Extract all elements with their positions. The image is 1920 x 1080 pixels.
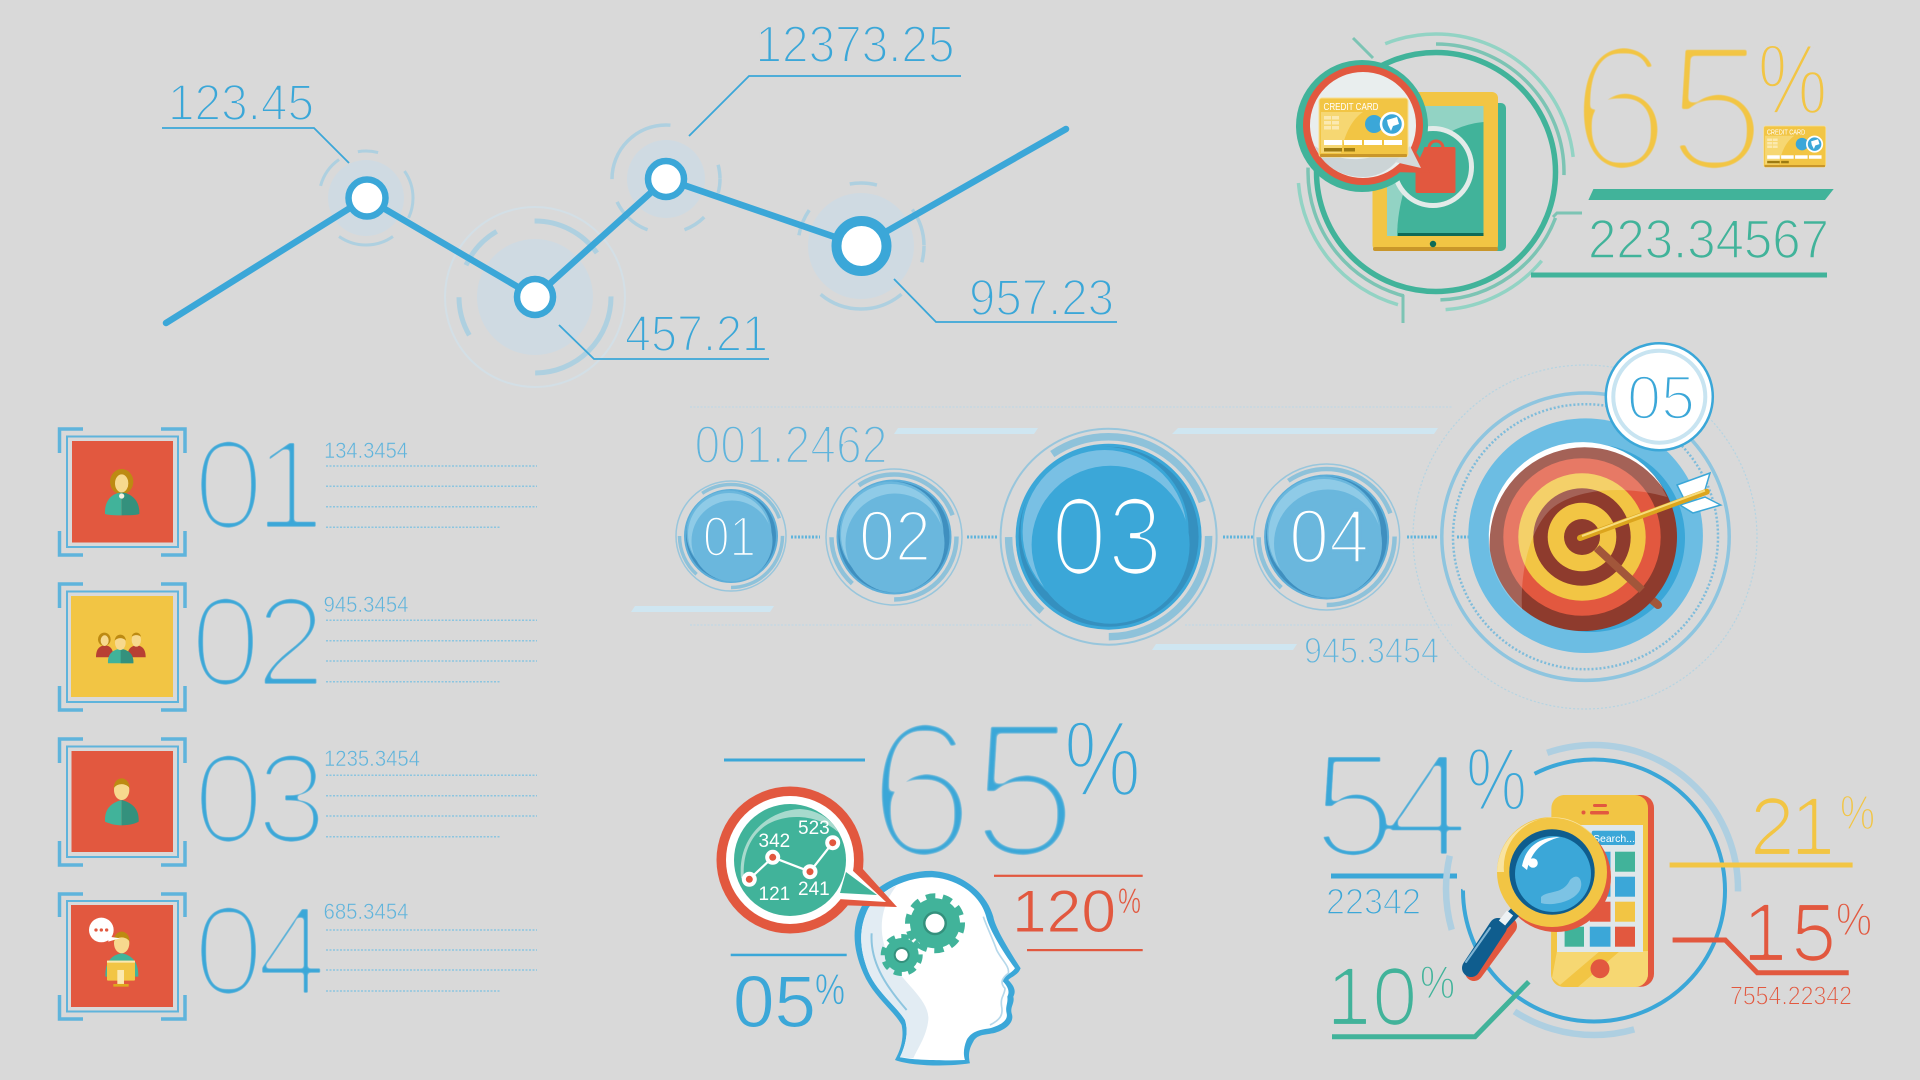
light rails [631,407,1452,650]
big blue 65 percent: 65 [867,681,1078,899]
value 02: 945.3454 [324,592,408,617]
frame 04 [60,894,185,1019]
shopping bag [1416,141,1456,193]
phone: Search... [1593,833,1635,845]
panel: step circles timeline [631,343,1757,709]
head silhouette [855,871,1021,1065]
list row 02 [60,571,537,714]
target disc [1468,418,1703,653]
speech bubble chart: 121 [758,884,790,905]
big blue 65 percent: % [1064,698,1141,819]
icon: woman [105,469,139,515]
credit card large: CREDIT CARD [1324,102,1378,113]
line chart panel [162,16,1117,387]
circle 03: 03 [1051,476,1163,598]
speech bubble chart: 523 [798,818,830,839]
phone rings [1446,741,1742,1037]
value 001.2462: 001.2462 [694,415,888,475]
value 945.3454: 945.3454 [1304,630,1439,671]
green 10 percent [1326,952,1529,1042]
green 10 percent: % [1420,956,1455,1008]
blue 05 percent: 05 [733,962,816,1043]
icon: man at computer [89,918,138,987]
speech bubble [1296,60,1430,192]
teal bar [1588,189,1834,200]
chart labels [168,16,1114,362]
chart labels: 457.21 [625,305,768,362]
magnifier [1466,817,1611,972]
dotted lines 01 [326,466,537,527]
value 03: 1235.3454 [324,746,420,771]
teal value: 223.34567 [1588,208,1829,270]
blue rule 54 [1331,874,1457,878]
red 120 percent: 120 [1012,878,1116,945]
dartboard [1488,442,1685,632]
list row 04 [60,880,537,1023]
target rings [1413,365,1757,709]
circle 04 [1254,464,1400,610]
value 01: 134.3454 [324,438,408,463]
panel: numbered list [60,414,537,1023]
number 03: 03 [193,728,327,871]
target 05 [1413,343,1757,709]
big yellow 65 percent: 65 [1570,8,1766,209]
list row 01 [60,414,537,557]
phone [1551,795,1654,987]
badge 05: 05 [1627,364,1695,433]
number 04: 04 [193,880,327,1023]
speech bubble chart [716,786,897,934]
dotted lines 03 [326,775,537,837]
dotted lines 02 [326,620,537,682]
blue 05 percent: % [815,965,845,1014]
red 15 percent [1673,888,1872,1010]
frame 02 [60,584,185,710]
credit card large [1319,98,1408,157]
blue 05 percent [731,954,847,1043]
chart halos [319,125,924,387]
badge 05 [1606,343,1713,450]
blue rule [724,758,865,762]
icon: man [105,778,139,825]
panel: head and gears [716,681,1143,1065]
circle 01: 01 [703,505,756,569]
panel: credit card tablet [1296,8,1834,323]
list row 03 [60,728,537,871]
number 01: 01 [193,414,325,557]
big blue 54 percent: 54 [1312,721,1469,889]
circle 04: 04 [1289,494,1369,580]
red 15 percent: 7554.22342 [1730,982,1852,1010]
red 15 percent: % [1836,893,1872,945]
credit card small: CREDIT CARD [1767,129,1805,136]
speech bubble chart: 342 [758,831,790,852]
gears [884,897,961,973]
chart labels: 12373.25 [756,16,954,74]
yellow 21 percent: 21 [1750,782,1836,872]
chart labels: 957.23 [969,269,1114,326]
frame 03 [60,739,185,865]
circle 02: 02 [859,497,931,577]
teal underline [1531,272,1827,278]
number 02: 02 [190,571,326,714]
chart labels: 123.45 [168,74,314,131]
value 04: 685.3454 [324,899,408,924]
icon: group [96,633,146,663]
chart nodes [348,161,886,315]
circle 01 [676,481,786,591]
big yellow 65 percent: % [1758,24,1828,136]
circle 03 [1001,429,1217,645]
chart leader lines [162,76,1117,359]
big blue 54 percent: % [1466,729,1527,829]
dotted lines 04 [326,930,537,991]
green 10 percent: 10 [1326,952,1418,1042]
teal rings [1298,34,1582,323]
red 15 percent: 15 [1742,888,1837,978]
arrow [1580,473,1721,538]
red 120 percent [994,875,1143,951]
yellow 21 percent [1670,782,1875,872]
credit card small [1764,126,1826,167]
frame 01 [60,429,185,555]
red 120 percent: % [1118,882,1141,921]
speech bubble chart: 241 [798,879,830,900]
panel: phone search [1312,721,1875,1042]
value 22342: 22342 [1326,881,1421,922]
chart line [166,129,1066,323]
dotted connectors [791,536,1480,538]
tablet [1372,92,1506,251]
yellow 21 percent: % [1840,787,1875,840]
circle 02 [826,469,962,605]
